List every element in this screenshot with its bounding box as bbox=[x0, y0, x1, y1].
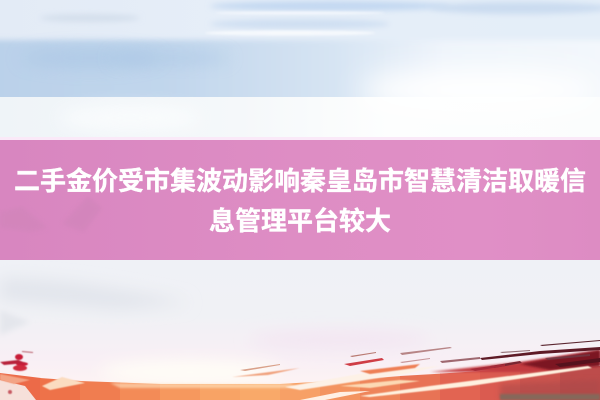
pink title band bbox=[0, 140, 600, 260]
title bbox=[14, 166, 586, 236]
title: 二手金价受市集波动影响秦皇岛市智慧清洁取暖信 bbox=[14, 166, 586, 196]
sunset ground bbox=[0, 366, 600, 400]
cream and red streaks bbox=[0, 350, 600, 400]
paint splatter strokes bbox=[240, 340, 600, 371]
upper sky clouds bbox=[0, 1, 600, 140]
red paint splash, left bbox=[0, 351, 33, 394]
title: 息管理平台较大 bbox=[209, 206, 391, 236]
lower sky haze bbox=[0, 278, 430, 384]
faint mountains bbox=[0, 196, 102, 232]
